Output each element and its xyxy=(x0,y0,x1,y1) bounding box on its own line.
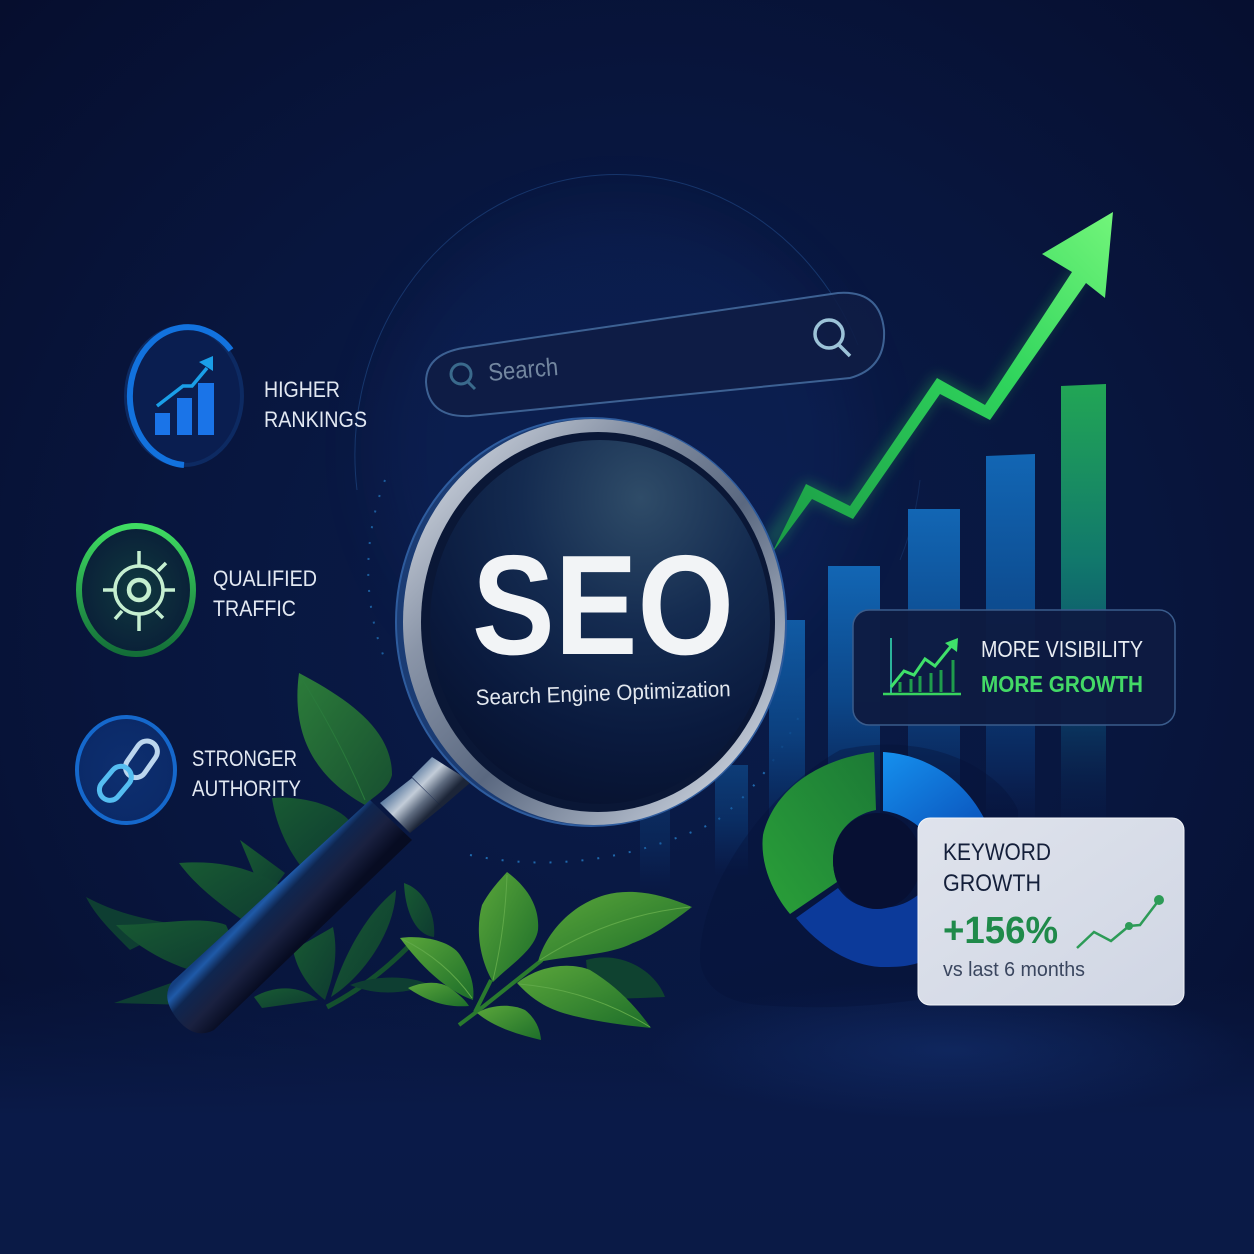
front leaves xyxy=(400,872,692,1040)
icon: search left xyxy=(451,364,475,389)
keyword card xyxy=(918,818,1184,1005)
card note: vs last 6 months xyxy=(943,959,1085,981)
percentage: +156% xyxy=(943,910,1058,952)
icon group: stronger authority xyxy=(77,717,175,823)
bars xyxy=(155,383,214,435)
label: qualified traffic: QUALIFIED xyxy=(213,566,317,591)
search bar xyxy=(426,293,884,416)
growth arrow xyxy=(770,212,1113,553)
SEO title: SEO xyxy=(472,526,734,685)
subtitle: Search Engine Optimization xyxy=(475,676,731,710)
panel text: MORE VISIBILITY xyxy=(981,636,1143,662)
search label: Search xyxy=(487,353,559,387)
decorative orbit rings xyxy=(355,175,920,863)
icon group: higher rankings xyxy=(126,327,242,465)
label: higher rankings: RANKINGS xyxy=(264,407,367,432)
sparkline xyxy=(1077,895,1164,948)
label: stronger authority: STRONGER xyxy=(192,746,297,771)
label: higher rankings: HIGHER xyxy=(264,377,340,402)
icon group: qualified traffic xyxy=(79,526,193,654)
label: qualified traffic: TRAFFIC xyxy=(213,596,296,621)
donut chart xyxy=(700,745,1018,1007)
card title: GROWTH xyxy=(943,870,1041,897)
back leaves xyxy=(86,673,665,1008)
label: stronger authority: AUTHORITY xyxy=(192,776,301,801)
visibility panel: MORE GROWTH xyxy=(981,671,1143,697)
icon: search right xyxy=(815,320,850,356)
bar chart xyxy=(640,384,1106,890)
visibility panel xyxy=(853,610,1175,725)
magnifying glass handle xyxy=(167,757,471,1033)
card title: KEYWORD xyxy=(943,839,1051,866)
icon: mini chart xyxy=(883,638,961,694)
mini arrow xyxy=(157,356,213,406)
magnifying glass lens xyxy=(396,418,786,826)
